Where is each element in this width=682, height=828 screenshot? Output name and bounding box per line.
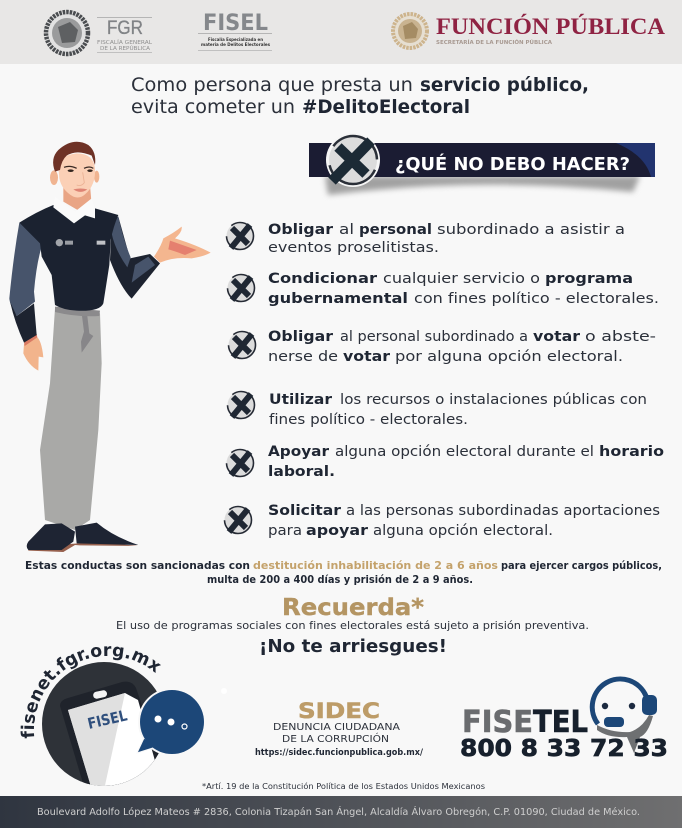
title: [131, 75, 589, 118]
head: [50, 142, 99, 213]
SIDEC block: [255, 699, 424, 758]
item 2: programa: [545, 270, 633, 287]
SIDEC block: DE LA CORRUPCIÓN: [282, 732, 389, 745]
header band with logos: [0, 0, 682, 64]
heading: recuerda: Recuerda*: [282, 593, 424, 621]
FISETEL block: TEL: [533, 705, 588, 740]
logo: FGR: [97, 17, 152, 53]
logo: Función Pública: FUNCIÓN PÚBLICA: [436, 13, 665, 39]
item 3: votar: [533, 328, 581, 345]
item 6: [224, 502, 660, 539]
upper body: [9, 197, 211, 371]
item 3: al personal subordinado a: [340, 328, 528, 345]
title: evita cometer un: [131, 97, 295, 118]
logo: FGR: FGR: [107, 18, 143, 39]
logo: Función Pública: SECRETARÍA DE LA FUNCIÓN PÚBLICA: [436, 38, 552, 46]
chat bubble: [137, 688, 206, 756]
sanctions text: Estas conductas son sancionadas con: [25, 560, 250, 572]
item 6: Solicitar: [268, 502, 342, 519]
sweater logos: [56, 239, 63, 246]
item 4: [228, 391, 647, 428]
item 2: con fines político - electorales.: [414, 290, 659, 307]
title: Como persona que presta un: [131, 75, 413, 96]
fisenet logo: [20, 646, 204, 786]
left arm: [9, 223, 43, 316]
item 3: votar: [343, 348, 391, 365]
small decorative speck: [221, 688, 227, 694]
banner X icon: [326, 133, 380, 187]
illustration: man in sweater: [9, 142, 211, 552]
right arm: [110, 217, 160, 299]
sanctions text: destitución inhabilitación de 2 a 6 años: [253, 560, 498, 572]
item 2: gubernamental: [268, 290, 408, 307]
SIDEC block: SIDEC: [298, 699, 380, 723]
torso: [19, 205, 118, 311]
logo: FGR: FISCALÍA GENERAL: [97, 39, 152, 46]
item 6: alguna opción electoral.: [373, 522, 553, 539]
FISETEL block: 800 8 33 72 33: [460, 736, 668, 762]
icon: crossed circle: [228, 274, 254, 302]
collar: [53, 197, 95, 223]
sanctions text: multa de 200 a 400 días y prisión de 2 a 9 años.: [207, 574, 473, 586]
item 2: cualquier servicio o: [383, 270, 540, 287]
icon: crossed circle: [226, 222, 254, 250]
item 1: al: [339, 221, 354, 238]
item 3: o abste-: [585, 328, 656, 345]
item 4: los recursos o instalaciones públicas con: [340, 391, 647, 408]
logo: FISEL: [198, 11, 272, 51]
sanctions text: para ejercer cargos públicos,: [501, 560, 662, 572]
item 1: [226, 221, 625, 256]
logo: FISEL: Fiscalía Especializada en: [208, 36, 263, 43]
SIDEC block: DENUNCIA CIUDADANA: [273, 722, 400, 733]
item 2: Condicionar: [268, 270, 378, 287]
item 5: Apoyar: [268, 443, 330, 460]
dark circle with phone: [42, 662, 159, 786]
icon: crossed circle: [228, 392, 254, 418]
banner: que no debo hacer: [309, 133, 655, 195]
item 3: Obligar: [268, 328, 334, 345]
SIDEC block: https://sidec.funcionpublica.gob.mx/: [255, 748, 424, 758]
item 5: [226, 443, 664, 480]
trousers and shoes: [27, 308, 138, 552]
item 1: eventos proselitistas.: [268, 239, 439, 256]
no te arriesgues: ¡No te arriesgues!: [259, 637, 447, 657]
item 5: horario: [599, 443, 664, 460]
item 2: [228, 270, 659, 307]
left hand: [23, 336, 43, 371]
curved url: fisenet.fgr.org.mx: [20, 646, 161, 738]
icon: crossed circle: [226, 450, 254, 476]
item 5: alguna opción electoral durante el: [335, 443, 594, 460]
icon: headset: [592, 679, 657, 753]
title: #DelitoElectoral: [302, 97, 470, 118]
reminder text: El uso de programas sociales con fines electorales está sujeto a prisión preventiva.: [116, 620, 589, 632]
icon: crossed circle: [224, 506, 252, 534]
item 3: nerse de: [268, 348, 338, 365]
logo: FGR: DE LA REPÚBLICA: [100, 45, 151, 52]
banner: que no debo hacer: ¿QUÉ NO DEBO HACER?: [395, 153, 630, 175]
logo: national emblem FGR: [46, 12, 88, 54]
footnote: *Artí. 19 de la Constitución Política de los Estados Unidos Mexicanos: [202, 782, 485, 791]
item 1: personal: [359, 221, 432, 238]
icon: crossed circle: [228, 332, 256, 358]
FISETEL block: [460, 679, 668, 762]
sanctions text: [25, 560, 662, 586]
footer bar: Boulevard Adolfo López Mateos # 2836, Colonia Tizapán San Ángel, Alcaldía Álvaro Obregón, C.P. 01090, Ciudad de México.: [37, 805, 640, 818]
item 3: por alguna opción electoral.: [395, 348, 623, 365]
item 6: apoyar: [306, 522, 369, 539]
item 4: fines político - electorales.: [269, 411, 468, 428]
item 3: [228, 328, 656, 365]
item 1: subordinado a asistir a: [437, 221, 625, 238]
logo: FISEL: materia de Delitos Electorales: [201, 42, 270, 48]
title: servicio público,: [420, 75, 589, 96]
item 6: a las personas subordinadas aportaciones: [346, 502, 660, 519]
right hand: [154, 227, 211, 263]
logo: gold emblem: [393, 14, 427, 48]
FISETEL block: FISE: [462, 705, 533, 740]
logo: FISEL: FISEL: [203, 11, 268, 36]
item 5: laboral.: [268, 463, 335, 480]
item 1: Obligar: [268, 221, 334, 238]
FISEL label: FISEL: [86, 706, 129, 733]
item 4: Utilizar: [269, 391, 333, 408]
item 6: para: [268, 522, 302, 539]
footer bar: [0, 796, 682, 828]
